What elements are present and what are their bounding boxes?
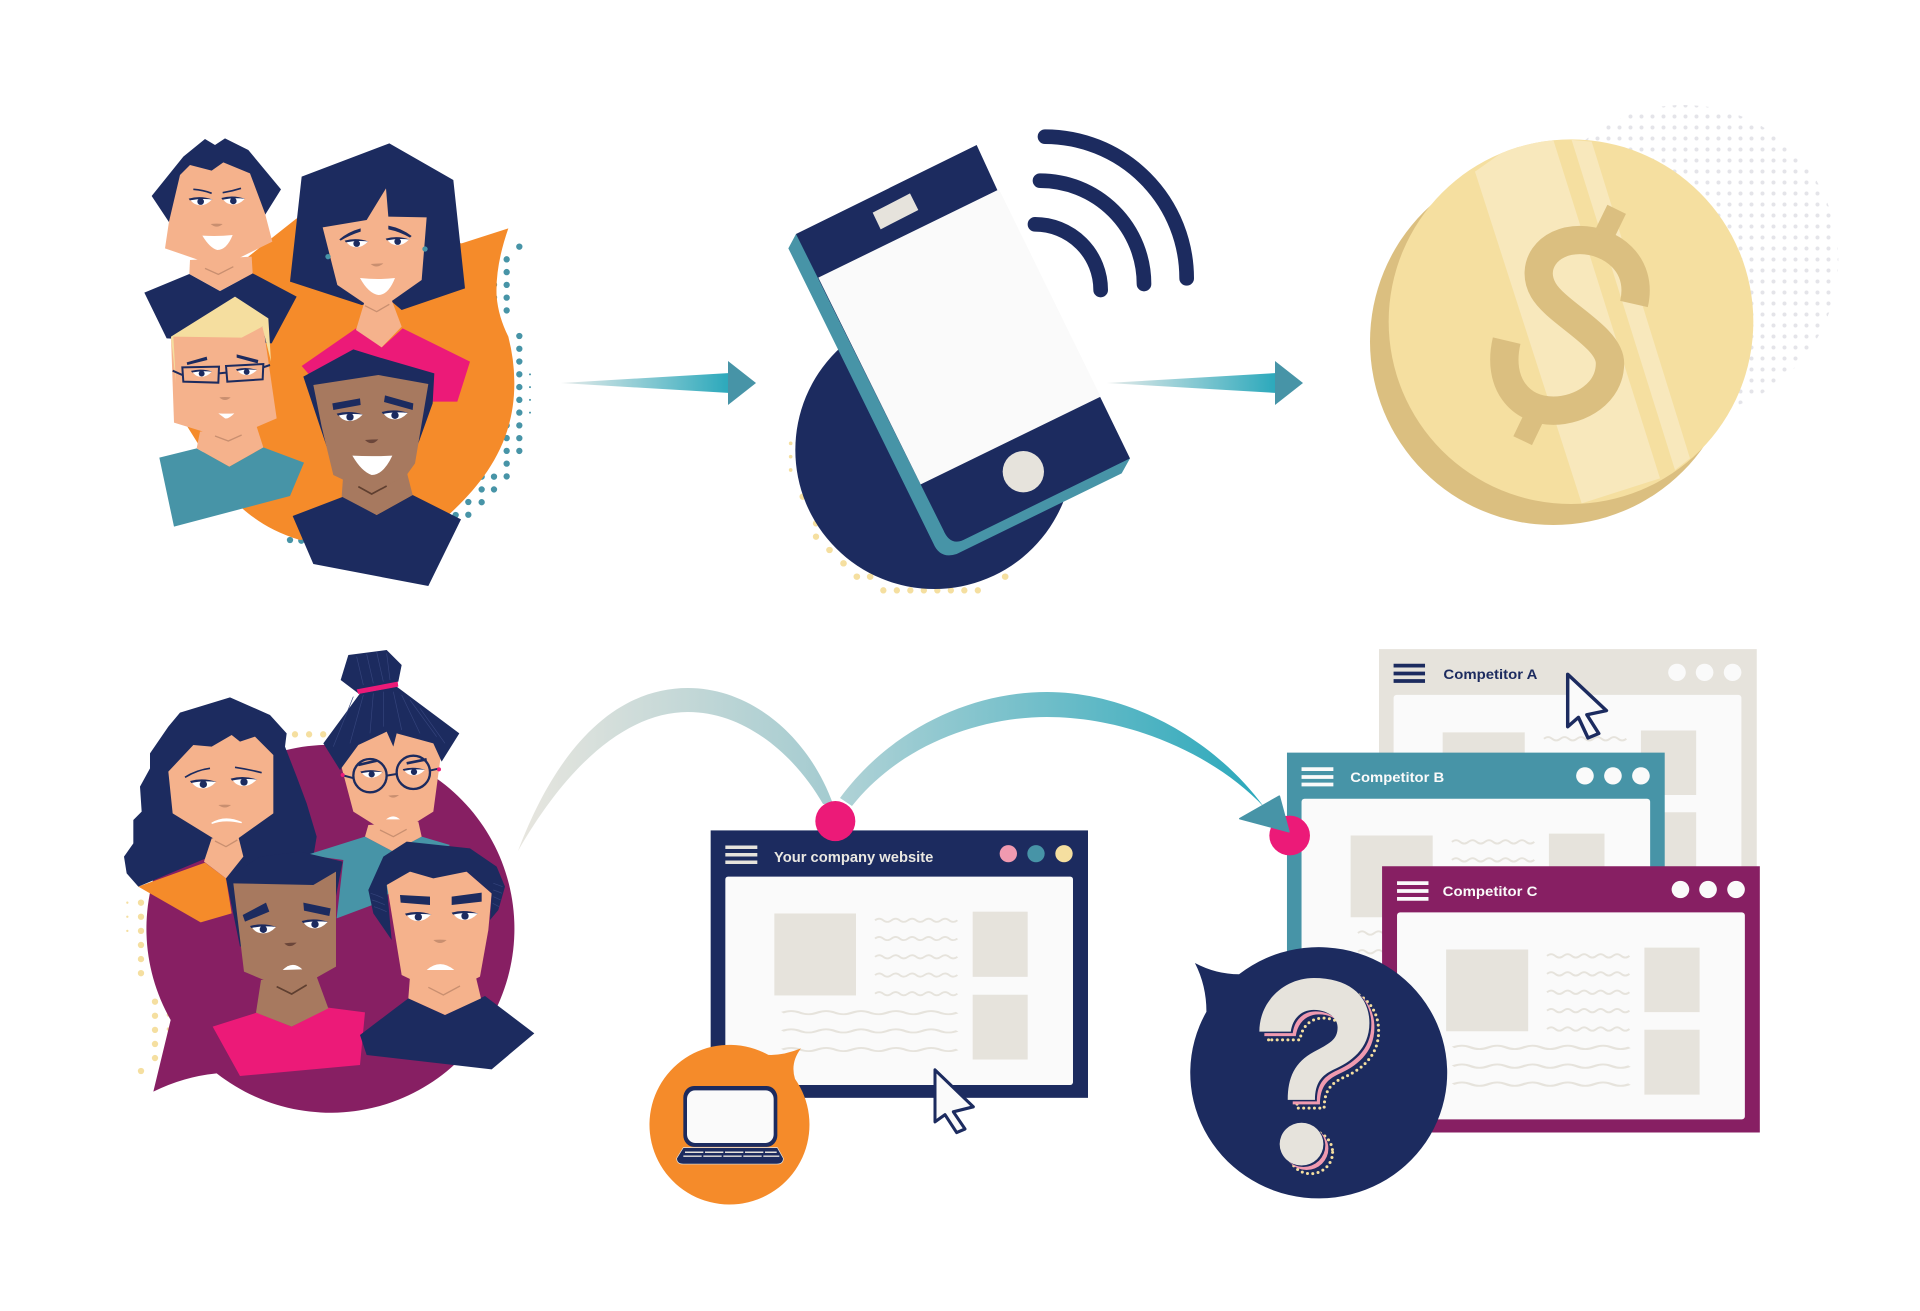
person: smiling man [293, 349, 461, 586]
orange laptop bubble [649, 1045, 809, 1204]
window: competitor B: Competitor B [1350, 770, 1444, 786]
arrowhead [1240, 796, 1289, 832]
person: man in navy shirt [360, 842, 534, 1069]
navy question bubble [1190, 947, 1447, 1198]
orange speech bubble [187, 218, 514, 540]
page placeholders [774, 912, 1028, 1060]
person: woman with bun and round glasses [307, 650, 459, 918]
yellow dots [127, 734, 327, 1073]
group: gold dollar coin [1370, 105, 1838, 525]
person: top left man [144, 138, 297, 343]
arc: customers to company website [518, 688, 833, 851]
icon: wifi signal [1035, 137, 1187, 290]
coin shine [1475, 123, 1690, 503]
window buttons [1000, 845, 1073, 862]
phone [788, 145, 1130, 555]
group: competitor windows [1190, 649, 1760, 1198]
window: competitor C: Competitor C [1443, 884, 1538, 900]
window: competitor A: Competitor A [1443, 667, 1538, 683]
text squiggles [782, 919, 957, 1051]
window: competitor B [1287, 753, 1665, 1024]
grey halftone dots [1528, 105, 1838, 415]
group: happy customers [144, 138, 530, 586]
arc: company website to competitors [840, 692, 1264, 807]
icon: question mark [1259, 978, 1379, 1174]
window: your company website [649, 801, 1088, 1204]
group: unhappy customers [124, 650, 534, 1113]
website title: Your company website [774, 849, 933, 866]
coin face [1389, 139, 1753, 504]
person: curly hair woman [124, 697, 317, 922]
coin edge [1370, 158, 1737, 525]
icon: cursor [935, 1070, 973, 1133]
yellow dots [791, 443, 1005, 590]
window: competitor C [1382, 866, 1760, 1132]
arrow: customers to phone [561, 361, 756, 405]
person: man in pink shirt [213, 852, 365, 1076]
arrow: phone to coin [1107, 361, 1303, 405]
window: competitor A [1379, 649, 1757, 920]
icon: menu [725, 847, 757, 862]
purple speech bubble [146, 745, 514, 1113]
person: top right woman [290, 143, 470, 402]
navy circle [795, 311, 1073, 589]
teal halftone dots [290, 247, 530, 542]
pink connector dot [1269, 816, 1310, 855]
icon: dollar sign [1504, 209, 1636, 441]
person: man with glasses [159, 297, 304, 527]
group: phone with signal [788, 137, 1187, 590]
pink connector dot [815, 801, 855, 841]
